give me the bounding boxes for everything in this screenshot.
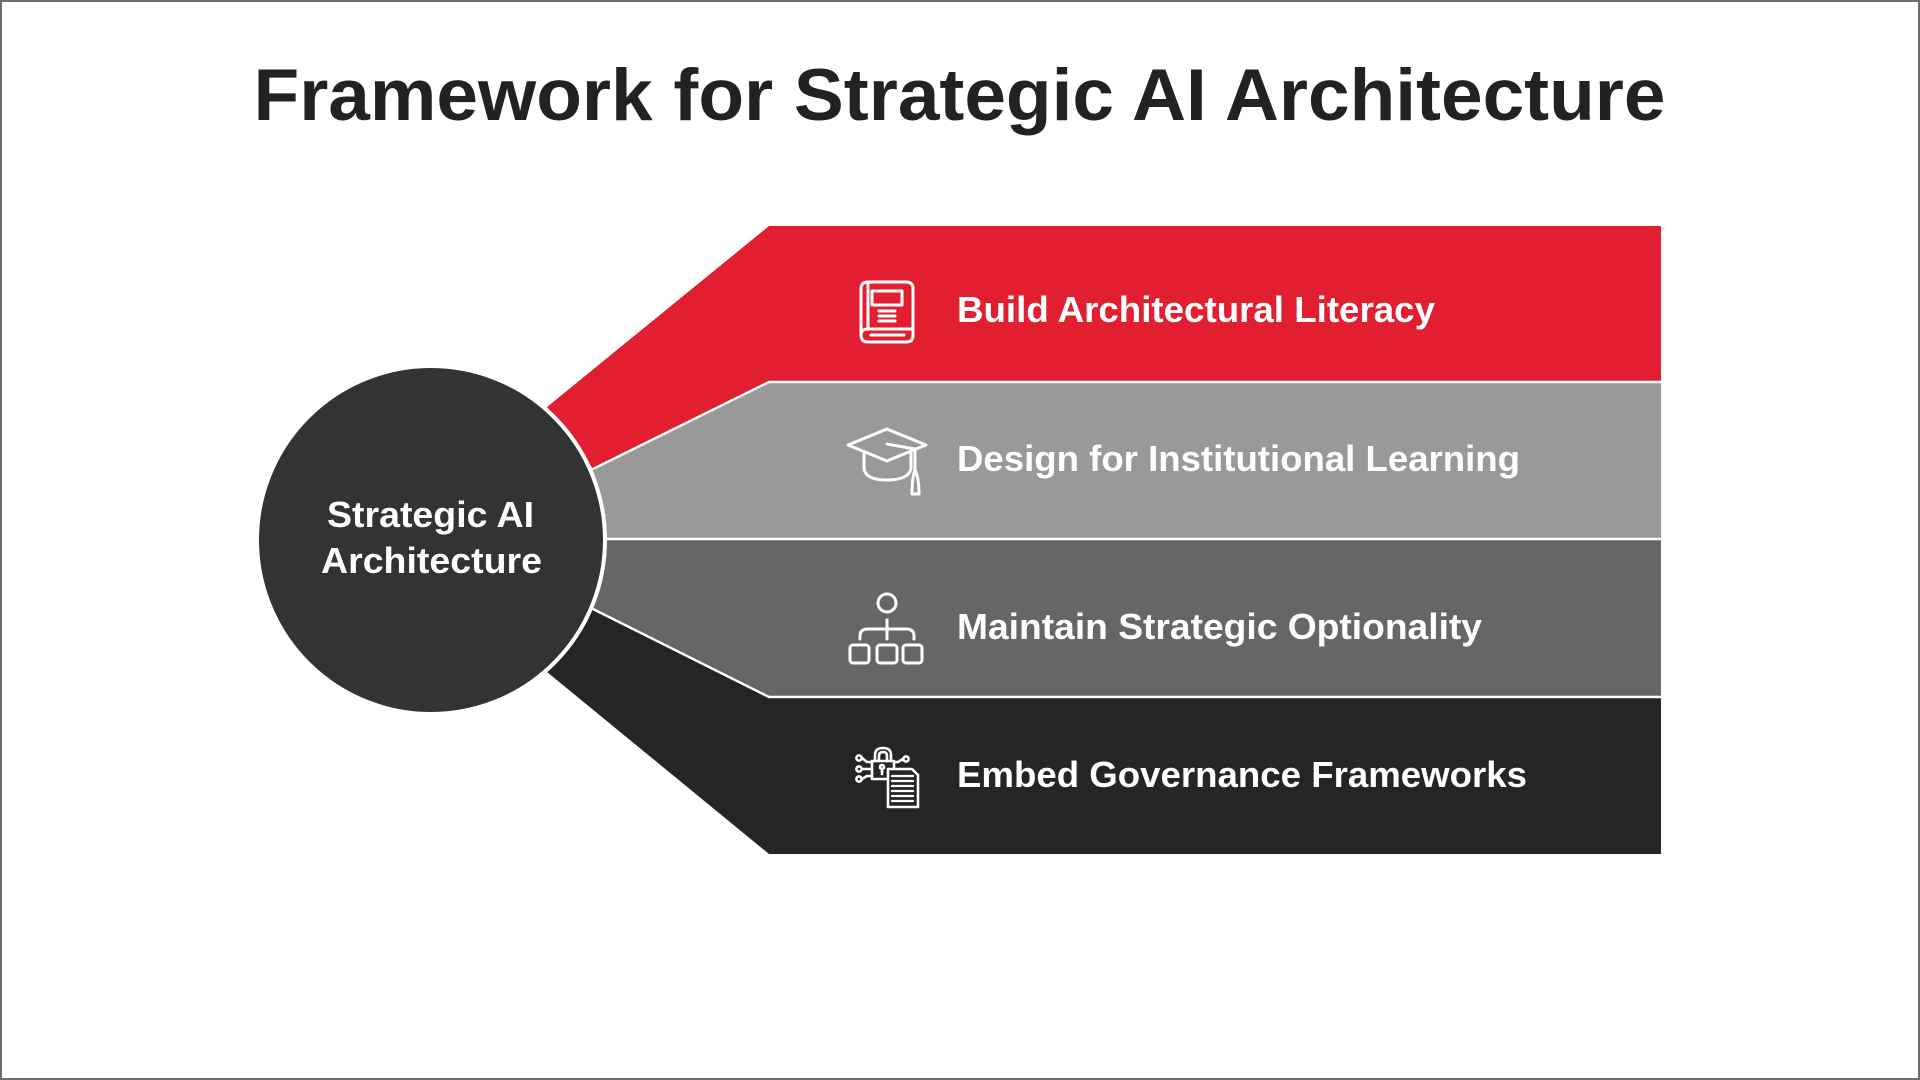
title: Framework for Strategic AI Architecture [254,55,1666,136]
label: design for institutional learning: Design for Institutional Learning [957,438,1520,479]
panel: maintain strategic optionality [593,539,1661,697]
icon: lock and document [856,748,918,807]
label: maintain strategic optionality: Maintain Strategic Optionality [957,606,1482,647]
panel: embed governance frameworks [547,609,1661,854]
icon: organization chart [850,594,922,663]
label: embed governance frameworks: Embed Governance Frameworks [957,754,1527,795]
panel: build architectural literacy [547,226,1661,469]
circle label: Architecture [321,540,542,581]
label: build architectural literacy: Build Architectural Literacy [957,289,1435,330]
panel: design for institutional learning [590,382,1661,539]
central circle [257,366,605,714]
icon: book [861,282,913,342]
icon: graduation cap [848,429,926,494]
circle label: Strategic AI [327,494,534,535]
dividers [593,382,1661,697]
